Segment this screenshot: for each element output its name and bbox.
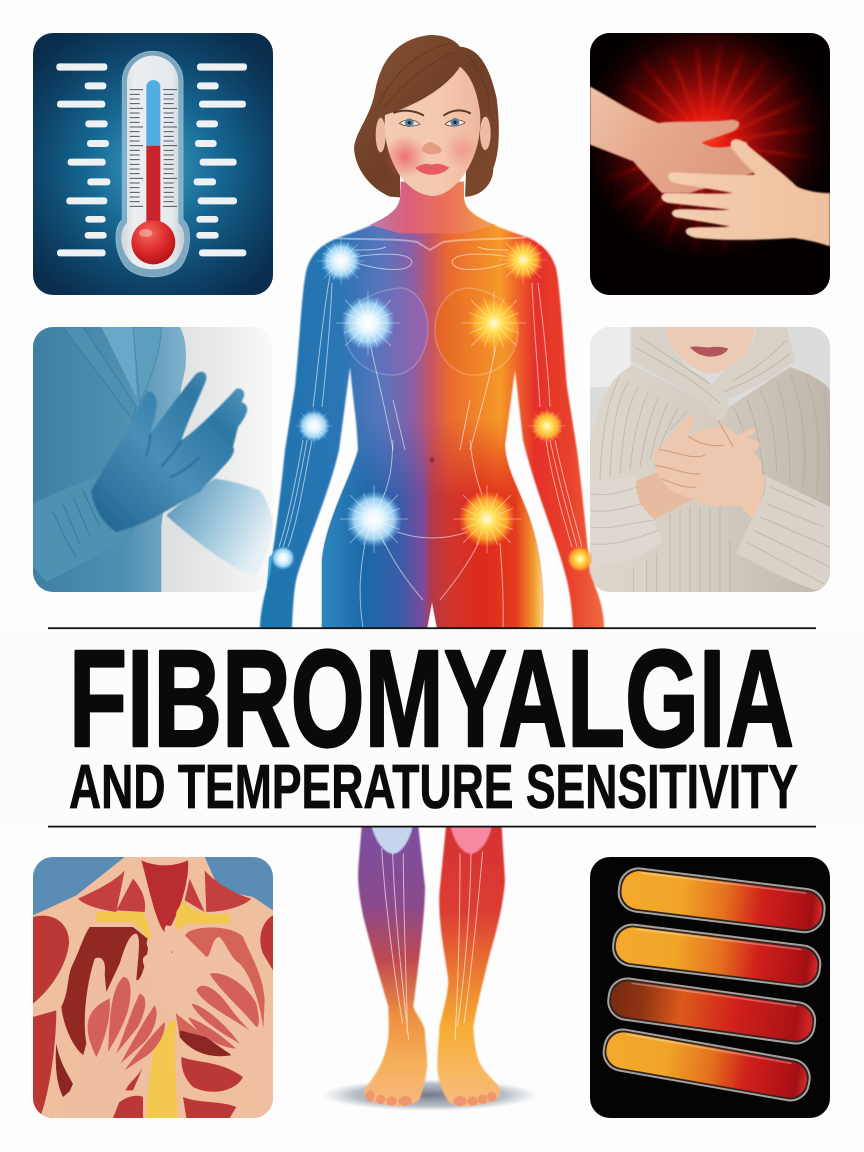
trapezius muscles [78, 870, 251, 912]
panel: woman in cream sweater [590, 327, 830, 592]
upper hand [590, 86, 753, 193]
panel: hands with red pain glow [590, 33, 830, 295]
knit ribs [600, 374, 830, 592]
panel: blue cold hand [33, 327, 273, 592]
face [665, 327, 755, 374]
left pectoral [61, 927, 150, 1057]
panel: muscles under hands [33, 857, 273, 1118]
scale ticks right [194, 63, 247, 256]
panel: thermometer [33, 33, 273, 295]
sweater body [590, 365, 830, 592]
ears [376, 117, 491, 152]
right leg [437, 827, 505, 1106]
left knee [372, 827, 413, 854]
lower hand [661, 139, 830, 246]
brows [393, 110, 471, 116]
left wrist [636, 472, 692, 520]
floor shadow [322, 1079, 538, 1111]
pain spots [271, 236, 593, 572]
radiating rays [593, 44, 823, 256]
right pectoral [166, 927, 265, 1044]
scale ticks left [56, 63, 110, 256]
icon: thermometer body [116, 51, 190, 277]
nerve lines [279, 237, 582, 628]
eyes [399, 118, 465, 127]
coat [33, 327, 186, 592]
bar 4 [601, 1027, 813, 1103]
bar 3 [606, 976, 818, 1046]
hair back [354, 35, 499, 197]
right hand [143, 925, 273, 1118]
nose [422, 142, 442, 154]
lapels [63, 327, 136, 420]
shirt [101, 327, 137, 399]
left hand [70, 934, 170, 1118]
panel: heat gradient bars [590, 857, 830, 1118]
top rule [48, 627, 816, 629]
neck [370, 182, 497, 233]
torso and arms [260, 200, 604, 628]
right cuff [737, 475, 830, 590]
right knee [451, 827, 492, 854]
lower ribs [111, 1057, 243, 1118]
figure hand overlap [266, 554, 273, 586]
blue hand [91, 372, 247, 532]
left leg [358, 827, 427, 1106]
lips [690, 347, 728, 357]
cuff [33, 480, 90, 582]
bust [345, 288, 518, 375]
hair strands [378, 43, 490, 112]
pale second hand [166, 479, 273, 575]
face [385, 67, 480, 196]
central figure [260, 35, 604, 1111]
right hand muscle fan [188, 973, 259, 1049]
neck muscle [141, 860, 188, 934]
shoulder muscles [33, 915, 273, 1114]
left cuff [600, 480, 663, 552]
bar 1 [616, 866, 827, 934]
hips overlay [322, 424, 543, 628]
clasped hands [653, 416, 765, 520]
title band [0, 622, 864, 828]
bottom rule [48, 826, 816, 828]
navel [430, 457, 434, 463]
lips [415, 164, 449, 175]
yellow fascia [96, 900, 230, 1118]
torso skin [33, 857, 273, 1118]
head [376, 43, 491, 196]
hood [632, 327, 795, 420]
left hand muscle fan [88, 977, 165, 1070]
bar 2 [611, 922, 822, 989]
